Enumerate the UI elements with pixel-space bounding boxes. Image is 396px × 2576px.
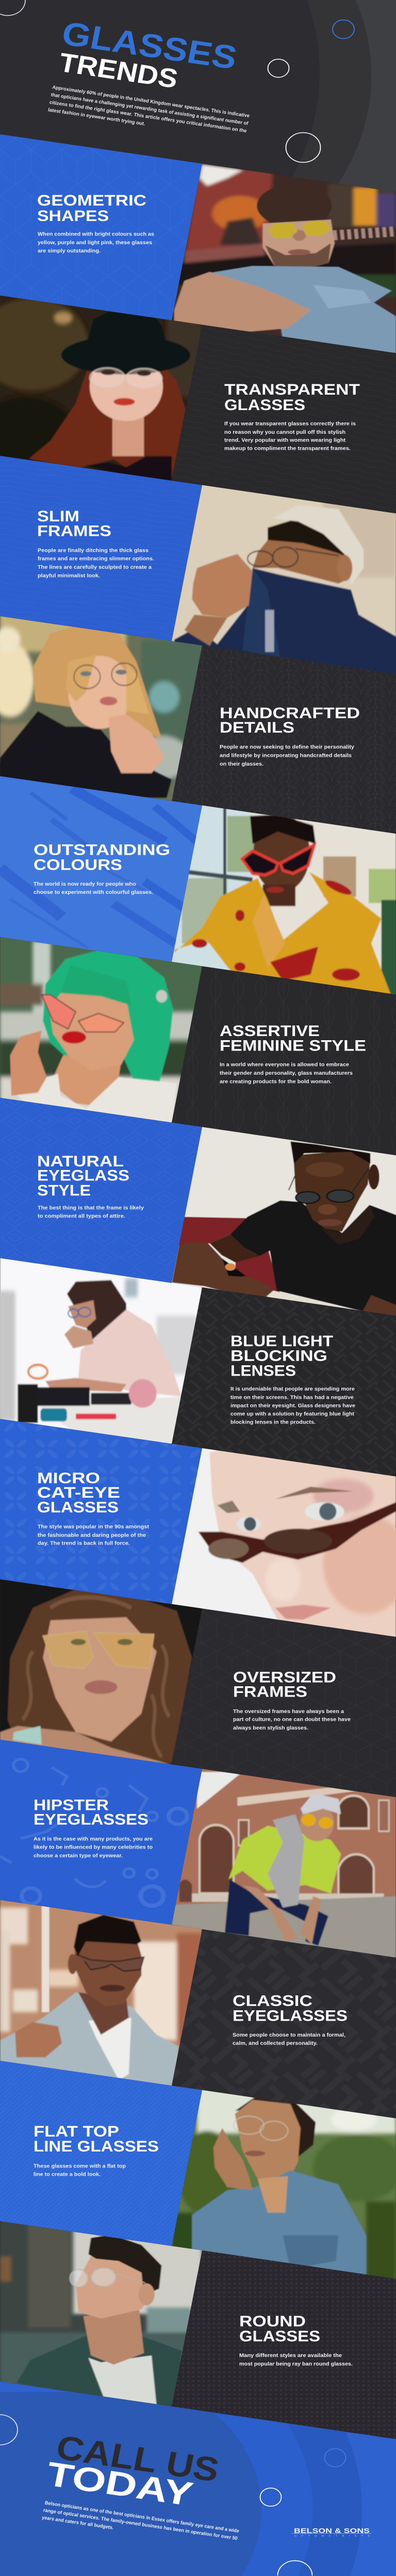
heading: natural eyeglass style (37, 1153, 129, 1199)
footer background with concentric arcs (0, 2379, 396, 2576)
photo: man in black t-shirt looking at phone (170, 1125, 396, 1321)
text block: blue light blocking lenses: impact on their eyesight. Glass designers have (230, 1403, 355, 1409)
panel: oversized frames background pattern (172, 1608, 396, 1797)
panel: geometric shapes (0, 134, 202, 320)
photo: woman in denim jacket among greenery (169, 2086, 396, 2283)
heading: hipster eyeglasses (34, 1797, 148, 1828)
intro paragraph: Approximately 60% of people in the United Kingdom wear spectacles. This is indicative (52, 85, 250, 119)
heading: micro cat-eye glasses (37, 1469, 120, 1516)
heading: transparent glasses (224, 381, 360, 414)
text block: assertive feminine style: are creating products for the bold woman. (220, 1079, 332, 1084)
heading: handcrafted details (220, 704, 360, 736)
heading: classic eyeglasses (233, 1992, 348, 2024)
text: hipster eyeglasses (34, 1836, 153, 1859)
heading: slim frames: FRAMES (37, 522, 111, 539)
text block: blue light blocking lenses: blocking lenses in the products. (230, 1419, 316, 1425)
heading: outstanding colours: COLOURS (34, 856, 122, 873)
title: glasses: GLASSES (59, 15, 240, 76)
heading: oversized frames (233, 1669, 336, 1700)
text: outstanding colours: The world is now ready for people who (34, 882, 137, 887)
photo: man in neon green shirt before historic building (169, 1766, 396, 1964)
panel: micro cat-eye glasses (0, 1419, 202, 1604)
heading: flat top line glasses (34, 2123, 159, 2155)
text block: blue light blocking lenses: It is undeniable that people are spending more (230, 1386, 355, 1392)
heading: micro cat-eye glasses: MICRO (37, 1469, 100, 1486)
text block: classic eyeglasses (233, 1992, 348, 2046)
panel: hipster eyeglasses (0, 1740, 202, 1925)
heading: micro cat-eye glasses: GLASSES (37, 1499, 119, 1516)
heading: handcrafted details: DETAILS (220, 719, 294, 736)
text block: blue light blocking lenses: come up with a solution by featuring blue light (230, 1411, 354, 1417)
heading: oversized frames: FRAMES (233, 1683, 307, 1700)
heading: outstanding colours: OUTSTANDING (34, 841, 170, 858)
logo: Belson and Sons Optometrists (292, 2528, 371, 2537)
text block: blue light blocking lenses: time on their screens. This has had a negative (230, 1395, 354, 1400)
photo: woman with blue glasses working on a laptop (0, 1257, 202, 1455)
panel: call us today footer (0, 2379, 396, 2576)
heading: hipster eyeglasses: HIPSTER (34, 1797, 109, 1814)
panel: natural eyeglass style (0, 1098, 202, 1283)
intro paragraph: citizens to find the right glass wear. This article offers you critical information on the (49, 100, 248, 134)
text block: assertive feminine style (220, 1022, 366, 1084)
heading: slim frames (37, 507, 111, 539)
decorative rings (0, 2415, 345, 2575)
photo: woman in black hat (0, 292, 202, 484)
text: hipster eyeglasses: choose a certain type of eyewear. (34, 1853, 123, 1859)
heading: blue light blocking lenses: LENSES (230, 1362, 296, 1379)
text: geometric shapes: When combined with bright colours such as (38, 231, 154, 237)
text: micro cat-eye glasses: day. The trend is back in full force. (38, 1540, 130, 1546)
intro paragraph: that opticians have a challenging yet rewarding task of assisting a significant number of (51, 92, 249, 126)
text block: transparent glasses: no reason why you cannot pull off this stylish (224, 429, 345, 435)
text: natural eyeglass style: The best thing is that the frame is likely (38, 1205, 144, 1211)
heading: blue light blocking lenses: BLUE LIGHT (230, 1332, 334, 1350)
text block: round glasses (239, 2313, 353, 2367)
text: micro cat-eye glasses: The style was popular in the 90s amongst (38, 1524, 149, 1530)
intro paragraph: latest fashion in eyewear worth trying out. (47, 108, 145, 127)
heading: flat top line glasses: FLAT TOP (34, 2123, 119, 2140)
photo: close-up of woman in tortoiseshell cat-eye sunglasses (169, 1443, 396, 1648)
photo: woman with wavy brown hair and gold square glasses (0, 1570, 202, 1770)
photo: woman with red cat-eye sunglasses (169, 804, 396, 1003)
heading: assertive feminine style: ASSERTIVE (220, 1022, 320, 1040)
text: slim frames: People are finally ditching the thick glass (38, 548, 148, 553)
heading: assertive feminine style: FEMININE STYLE (220, 1037, 366, 1054)
photo: man in yellow hexagon glasses (172, 162, 396, 356)
text: flat top line glasses: These glasses come with a flat top (34, 2163, 126, 2169)
panel: blue light blocking background pattern (172, 1287, 396, 1477)
closing paragraph: range of optical services. The family-owned business has been in operation for over 50 (43, 2508, 238, 2541)
heading: round glasses: ROUND (239, 2313, 306, 2330)
text: geometric shapes: yellow, purple and light pink, these glasses (38, 240, 152, 246)
text block: classic eyeglasses: Some people choose to maintain a formal, (233, 2032, 345, 2038)
text: slim frames: The lines are carefully sculpted to create a (38, 565, 152, 570)
header background with concentric arcs (0, 0, 396, 195)
heading: natural eyeglass style: STYLE (37, 1182, 91, 1199)
text block: oversized frames: part of culture, no one can doubt these have (233, 1717, 351, 1722)
text block: blue light blocking lenses (230, 1332, 355, 1425)
text: slim frames: playful minimalist look. (38, 573, 100, 579)
text block: transparent glasses: trend. Very popular with women wearing light (224, 437, 345, 443)
text: outstanding colours: choose to experiment with colourful glasses. (34, 890, 153, 895)
text: slim frames (38, 548, 154, 579)
text: outstanding colours (34, 882, 153, 895)
panel: round glasses background pattern (172, 2250, 396, 2439)
panel: handcrafted details background pattern (172, 646, 396, 834)
panel: slim frames (0, 456, 202, 641)
logo: Belson and Sons Optometrists: BELSON & SONS (294, 2528, 370, 2535)
text block: handcrafted details: and lifestyle by incorporating handcrafted details (220, 753, 352, 758)
heading: transparent glasses: GLASSES (224, 396, 305, 414)
text block: handcrafted details: on their glasses. (220, 761, 263, 767)
heading: natural eyeglass style: EYEGLASS (37, 1167, 129, 1184)
photo: blonde woman in round glasses (0, 608, 202, 801)
intro paragraph (47, 85, 250, 134)
text: geometric shapes: are simply outstanding. (38, 248, 101, 254)
text block: transparent glasses (224, 381, 360, 451)
heading: micro cat-eye glasses: CAT-EYE (37, 1484, 120, 1501)
closing paragraph: Belson opticians as one of the best opticians in Essex offers family eye care and a wide (44, 2500, 240, 2534)
heading: assertive feminine style (220, 1022, 366, 1054)
text block: oversized frames: always been stylish glasses. (233, 1725, 308, 1731)
text block: transparent glasses: makeup to compliment the transparent frames. (224, 446, 351, 451)
text: natural eyeglass style: to compliment all types of attire. (38, 1213, 125, 1219)
text: hipster eyeglasses: likely to be influenced by many celebrities to (34, 1844, 153, 1850)
heading: flat top line glasses: LINE GLASSES (34, 2138, 159, 2155)
title: call us: CALL US (53, 2429, 222, 2489)
text block: classic eyeglasses: calm, and collected personality. (233, 2041, 318, 2046)
heading: round glasses (239, 2313, 320, 2345)
photo: man with aviator glasses looking away (0, 2217, 202, 2409)
text: flat top line glasses (34, 2163, 126, 2177)
panel: transparent glasses background pattern (172, 325, 396, 514)
text block: handcrafted details (220, 704, 360, 767)
text block: round glasses: most popular being ray ban round glasses. (239, 2361, 353, 2367)
panel: dark panels column (172, 296, 396, 2441)
text block: transparent glasses: If you wear transparent glasses correctly there is (224, 421, 356, 427)
logo: Belson and Sons Optometrists: OPTOMETRISTS (294, 2535, 370, 2537)
text: hipster eyeglasses: As it is the case with many products, you are (34, 1836, 153, 1842)
text block: round glasses: Many different styles are available the (239, 2353, 342, 2359)
text: micro cat-eye glasses (38, 1524, 149, 1546)
heading: geometric shapes: SHAPES (37, 207, 109, 225)
title: trends: TRENDS (57, 47, 180, 94)
photo: man in denim jacket with dark glasses (0, 1896, 202, 2089)
heading: slim frames: SLIM (37, 507, 79, 524)
panel: header (0, 0, 396, 195)
heading: hipster eyeglasses: EYEGLASSES (34, 1811, 148, 1828)
heading: outstanding colours (34, 841, 170, 873)
text block: oversized frames (233, 1669, 351, 1731)
heading: classic eyeglasses: CLASSIC (233, 1992, 312, 2009)
panel: classic eyeglasses background pattern (172, 1929, 396, 2119)
panel: outstanding colours (0, 776, 202, 962)
text block: oversized frames: The oversized frames have always been a (233, 1709, 344, 1715)
title: today: TODAY (43, 2455, 196, 2514)
text: micro cat-eye glasses: the fashionable and daring people of the (38, 1533, 146, 1538)
text block: handcrafted details: People are now seeking to define their personality (220, 744, 354, 750)
text block: assertive feminine style: In a world where everyone is allowed to embrace (220, 1062, 349, 1067)
panel: flat top line glasses (0, 2061, 202, 2246)
panel: assertive feminine style background pattern (172, 966, 396, 1155)
heading: round glasses: GLASSES (239, 2328, 320, 2345)
heading: handcrafted details: HANDCRAFTED (220, 704, 360, 721)
photo: man with beanie covering face (169, 481, 396, 680)
text: flat top line glasses: line to create a bold look. (34, 2172, 101, 2177)
text block: assertive feminine style: their gender and personality, glass manufacturers (220, 1071, 353, 1076)
text: slim frames: frames and are embracing slimmer options. (38, 556, 154, 562)
text: natural eyeglass style (38, 1205, 144, 1219)
heading: geometric shapes: GEOMETRIC (37, 192, 146, 209)
heading: blue light blocking lenses: BLOCKING (230, 1347, 327, 1364)
heading: transparent glasses: TRANSPARENT (224, 381, 360, 398)
photo: woman with green hair and pink glasses (0, 931, 202, 1130)
heading: natural eyeglass style: NATURAL (37, 1153, 124, 1170)
heading: classic eyeglasses: EYEGLASSES (233, 2007, 348, 2024)
text: geometric shapes (38, 231, 154, 254)
decorative rings (0, 0, 354, 162)
heading: geometric shapes (37, 192, 146, 225)
closing paragraph: years and caters for all budgets. (41, 2515, 114, 2531)
heading: oversized frames: OVERSIZED (233, 1669, 336, 1686)
heading: blue light blocking lenses (230, 1332, 334, 1379)
